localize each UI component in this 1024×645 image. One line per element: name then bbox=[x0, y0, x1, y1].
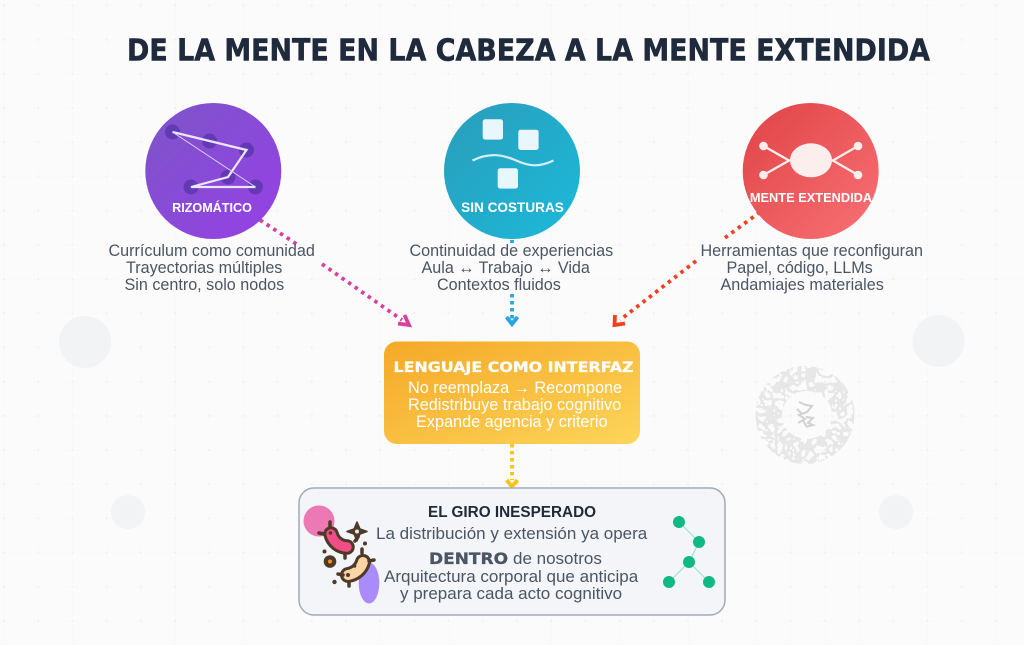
decorative small circle left bbox=[111, 495, 145, 529]
text: mente extendida description: Herramientas que reconfiguran bbox=[700, 242, 923, 260]
heading: interface: LENGUAJE COMO INTERFAZ bbox=[394, 360, 634, 376]
icon: rhizome network bbox=[165, 124, 263, 194]
label: sin costuras: SIN COSTURAS bbox=[461, 200, 564, 215]
text: sin costuras description: Continuidad de experiencias bbox=[410, 242, 613, 260]
text: turn description: EL GIRO INESPERADO bbox=[428, 504, 596, 521]
text: mente extendida description: Andamiajes materiales bbox=[720, 276, 884, 294]
title: DE LA MENTE EN LA CABEZA A LA MENTE EXTENDIDA bbox=[127, 34, 930, 68]
text: turn description: y prepara cada acto cognitivo bbox=[400, 584, 622, 603]
panel: el giro inesperado bbox=[299, 488, 725, 615]
text: interface description: Expande agencia y criterio bbox=[416, 413, 608, 431]
text: sin costuras description: Contextos fluidos bbox=[437, 276, 561, 294]
text: rizomático description: Currículum como comunidad bbox=[108, 242, 315, 260]
label: rizomático: RIZOMÁTICO bbox=[172, 200, 252, 215]
icon: green tree bbox=[663, 516, 715, 588]
text: turn description: Arquitectura corporal que anticipa bbox=[384, 567, 639, 586]
text: interface description: Redistribuye trabajo cognitivo bbox=[408, 396, 621, 414]
arrow: rizomático to interface bbox=[260, 220, 409, 325]
text: rizomático description: Sin centro, solo nodos bbox=[124, 276, 284, 294]
icon: fluid blocks bbox=[472, 119, 554, 189]
box: interface bbox=[384, 342, 640, 444]
panel: rizomático bbox=[108, 103, 315, 294]
decorative small circle right bbox=[879, 495, 913, 529]
panel: sin costuras bbox=[410, 103, 613, 294]
arrow: interface to turn bbox=[506, 444, 518, 486]
arrow: sin costuras to interface bbox=[506, 240, 518, 324]
panel: mente extendida bbox=[700, 103, 923, 294]
text: interface description bbox=[408, 379, 622, 431]
text: sin costuras description: Aula ↔ Trabajo ↔ Vida bbox=[422, 259, 590, 277]
icon: pink blob bbox=[304, 506, 334, 536]
text: interface description: No reemplaza → Recompone bbox=[408, 379, 622, 397]
text: turn description: La distribución y extensión ya opera bbox=[376, 524, 648, 543]
icon: bacteria bbox=[319, 522, 374, 586]
circle: rizomático bbox=[145, 103, 281, 239]
text: turn description: de nosotros bbox=[513, 549, 602, 568]
text: rizomático description: Trayectorias múltiples bbox=[126, 259, 282, 277]
text: mente extendida description: Papel, código, LLMs bbox=[726, 259, 873, 277]
decorative background circle right bbox=[912, 315, 964, 367]
circle: sin costuras bbox=[444, 103, 580, 239]
arrow: mente extendida to interface bbox=[614, 212, 760, 325]
circle: mente extendida bbox=[743, 103, 879, 239]
text: sin costuras description bbox=[410, 242, 613, 294]
decorative background circle left bbox=[59, 316, 111, 368]
icon: purple blob bbox=[359, 562, 379, 604]
decorative textured ring bbox=[756, 366, 855, 464]
box: turn bbox=[299, 488, 725, 615]
label: mente extendida: MENTE EXTENDIDA bbox=[750, 190, 872, 205]
text: turn description bbox=[376, 504, 648, 603]
text: turn description: DENTRO bbox=[429, 549, 508, 568]
icon: extended mind bbox=[759, 142, 862, 179]
text: rizomático description bbox=[108, 242, 315, 294]
text: mente extendida description bbox=[700, 242, 923, 294]
panel: lenguaje como interfaz bbox=[384, 342, 640, 444]
